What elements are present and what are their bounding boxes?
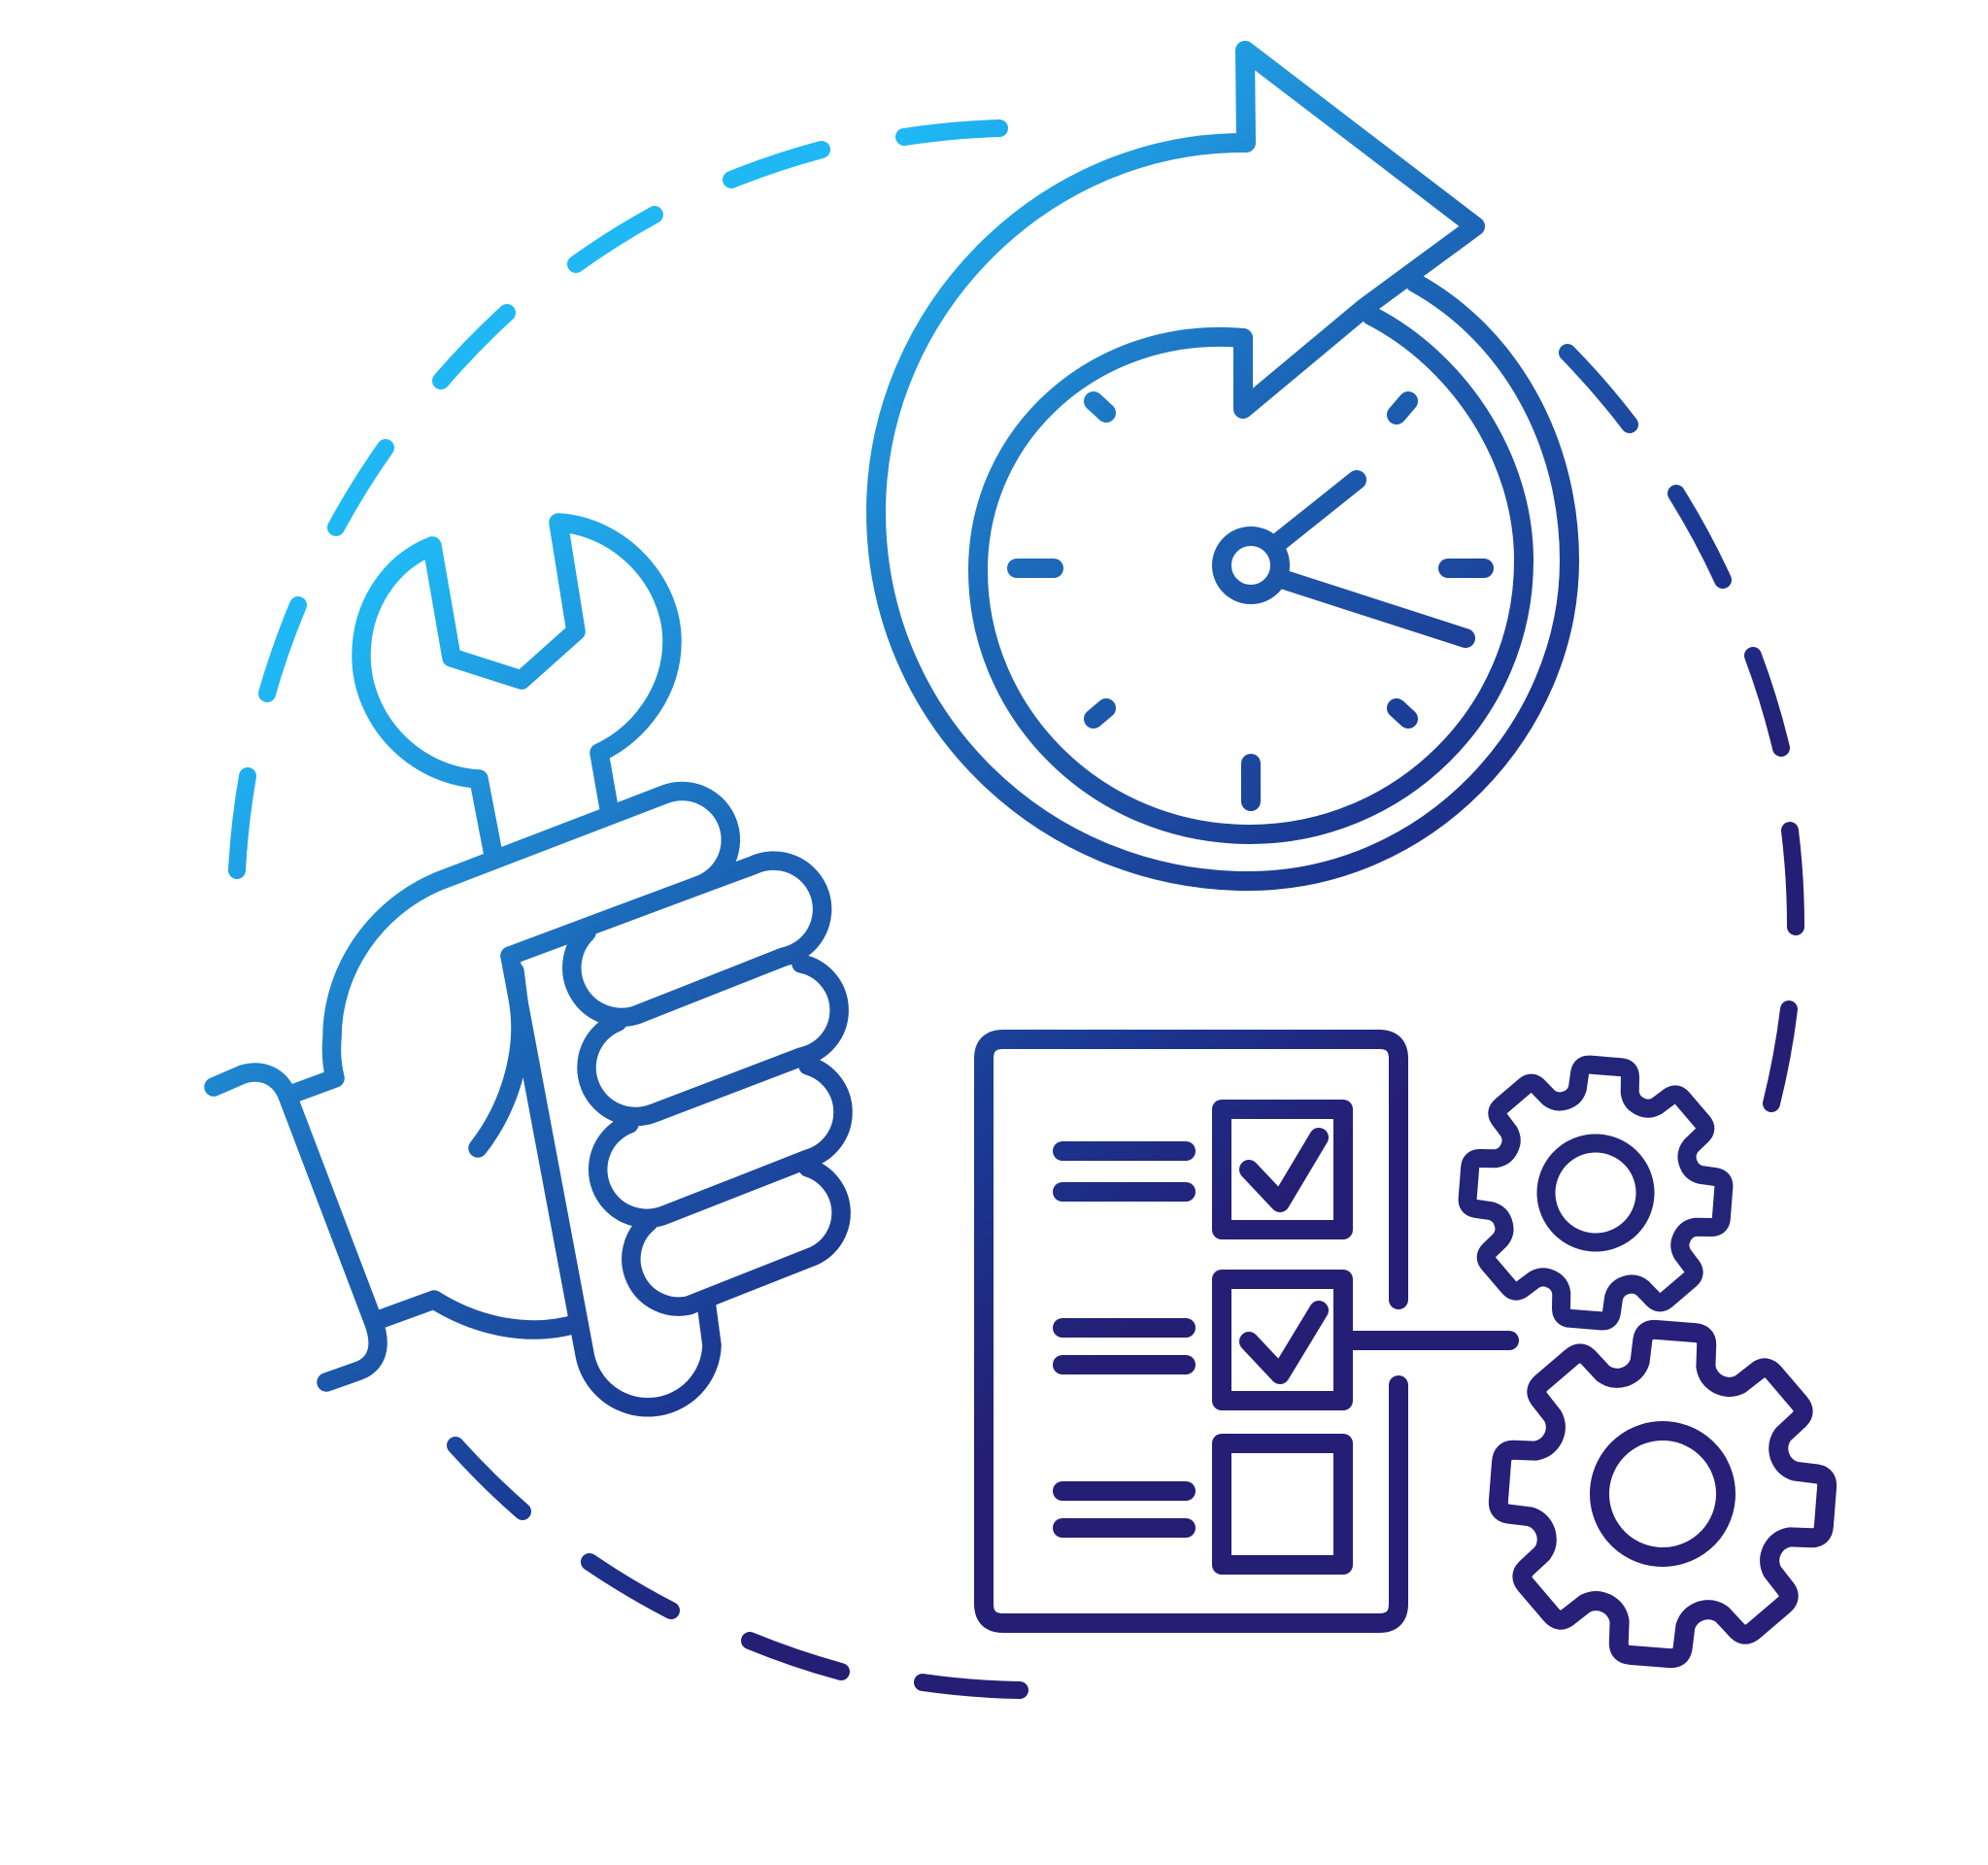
wrist and cuff <box>214 1072 579 1382</box>
icon: hand holding wrench <box>214 523 843 1407</box>
wrench handle <box>510 956 712 1407</box>
clock ticks <box>1017 401 1484 801</box>
icon: large gear <box>1487 1318 1838 1670</box>
document outline <box>984 1039 1398 1623</box>
clock hands <box>1280 480 1466 638</box>
row 3 unchecked <box>1062 1443 1343 1565</box>
wrench head <box>361 523 672 855</box>
hand back and first finger <box>287 792 730 1096</box>
row 1 checked <box>1062 1109 1343 1230</box>
fingers <box>572 861 823 1017</box>
row 2 checked with connector <box>1062 1279 1509 1401</box>
clock hub <box>1222 536 1280 594</box>
icon: small gear <box>1459 1056 1733 1330</box>
icon: checklist <box>984 1039 1509 1623</box>
circular arrow <box>876 51 1569 881</box>
palm crease <box>478 971 521 1148</box>
dashed circle <box>237 128 1796 1690</box>
clock face <box>978 316 1524 834</box>
icon: clock with circular arrow <box>876 51 1569 881</box>
